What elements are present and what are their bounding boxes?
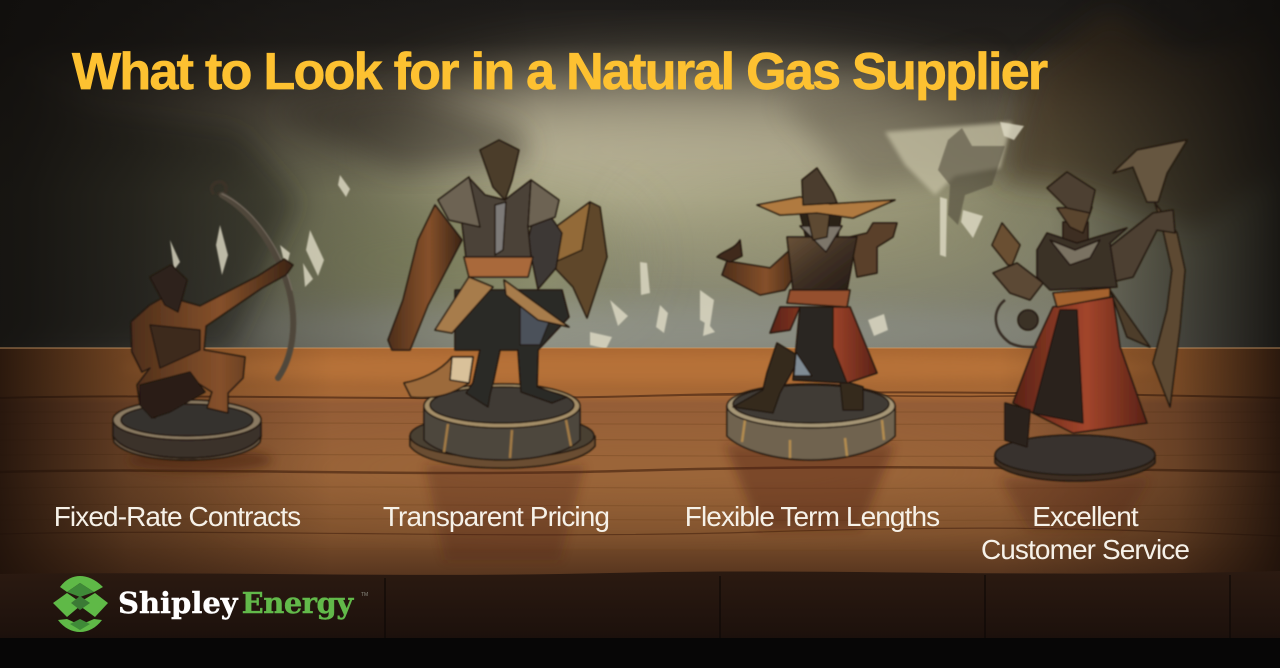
wizard legs bbox=[733, 343, 863, 413]
title: What to Look for in a Natural Gas Supplier bbox=[72, 43, 1046, 101]
knight pauldrons bbox=[438, 177, 480, 227]
figure 2: armored knight with shield bbox=[388, 140, 607, 468]
wooden table bbox=[0, 347, 1280, 580]
logo wordmark: ShipleyEnergy bbox=[118, 586, 353, 620]
knight left arm bbox=[388, 205, 462, 350]
right arm bbox=[1106, 210, 1175, 282]
label: excellent customer service: Customer Service bbox=[981, 534, 1189, 565]
label: flexible term lengths: Flexible Term Lengths bbox=[685, 501, 939, 532]
wizard head bbox=[807, 212, 830, 240]
archer bow bbox=[212, 182, 293, 378]
wizard red robe bbox=[770, 307, 877, 383]
wizard prop bbox=[717, 240, 742, 262]
neck bbox=[1063, 222, 1088, 248]
knight belt bbox=[464, 257, 533, 277]
hanging loop and medal bbox=[996, 300, 1038, 347]
robed figure base bbox=[995, 435, 1155, 481]
knight base bbox=[410, 384, 595, 468]
figure 4: robed figure with axe bbox=[992, 140, 1187, 481]
wizard base bbox=[727, 384, 895, 460]
knight right arm bbox=[528, 199, 562, 289]
logo icon: green woven globe bbox=[53, 576, 108, 632]
wizard center robe bbox=[793, 307, 847, 383]
axe haft bbox=[1153, 203, 1185, 407]
left hand bbox=[993, 263, 1043, 300]
figure 3: wizard with brim hat bbox=[717, 168, 897, 460]
wizard torso bbox=[787, 237, 857, 290]
table front edge bbox=[0, 571, 1280, 668]
wizard hat bbox=[757, 168, 895, 218]
label: fixed-rate contracts: Fixed-Rate Contracts bbox=[54, 501, 300, 532]
robe center bbox=[1033, 310, 1083, 423]
knight helmet bbox=[480, 140, 519, 200]
helmet bbox=[1047, 172, 1095, 213]
wall background bbox=[0, 0, 1280, 356]
axe blade bbox=[1113, 140, 1187, 202]
spear tip bbox=[992, 223, 1020, 265]
knight skirt and legs bbox=[455, 290, 569, 407]
figure 1: kneeling archer bbox=[113, 182, 293, 460]
label: transparent pricing: Transparent Pricing bbox=[383, 501, 609, 532]
robe bbox=[1013, 297, 1147, 433]
knight shield bbox=[538, 202, 607, 318]
knight scroll bbox=[404, 357, 473, 398]
text: TM bbox=[361, 592, 368, 598]
belt bbox=[1053, 288, 1110, 307]
label: excellent customer service bbox=[981, 501, 1189, 565]
wizard hair bbox=[800, 210, 842, 238]
feet bbox=[1005, 403, 1030, 447]
figure shadows bbox=[128, 445, 1150, 560]
label: excellent customer service: Excellent bbox=[1032, 501, 1138, 532]
wizard belt bbox=[787, 290, 850, 307]
knight torso bbox=[462, 178, 531, 257]
head bbox=[1057, 207, 1092, 233]
wizard left arm bbox=[722, 248, 802, 295]
side flap bbox=[1110, 290, 1150, 347]
wizard right arm bbox=[850, 223, 897, 277]
archer base bbox=[113, 400, 261, 460]
torso bbox=[1037, 228, 1127, 290]
archer helmet bbox=[150, 265, 187, 312]
archer dark shading bbox=[140, 372, 205, 418]
knight flaps bbox=[435, 277, 569, 333]
archer body bbox=[131, 259, 293, 418]
